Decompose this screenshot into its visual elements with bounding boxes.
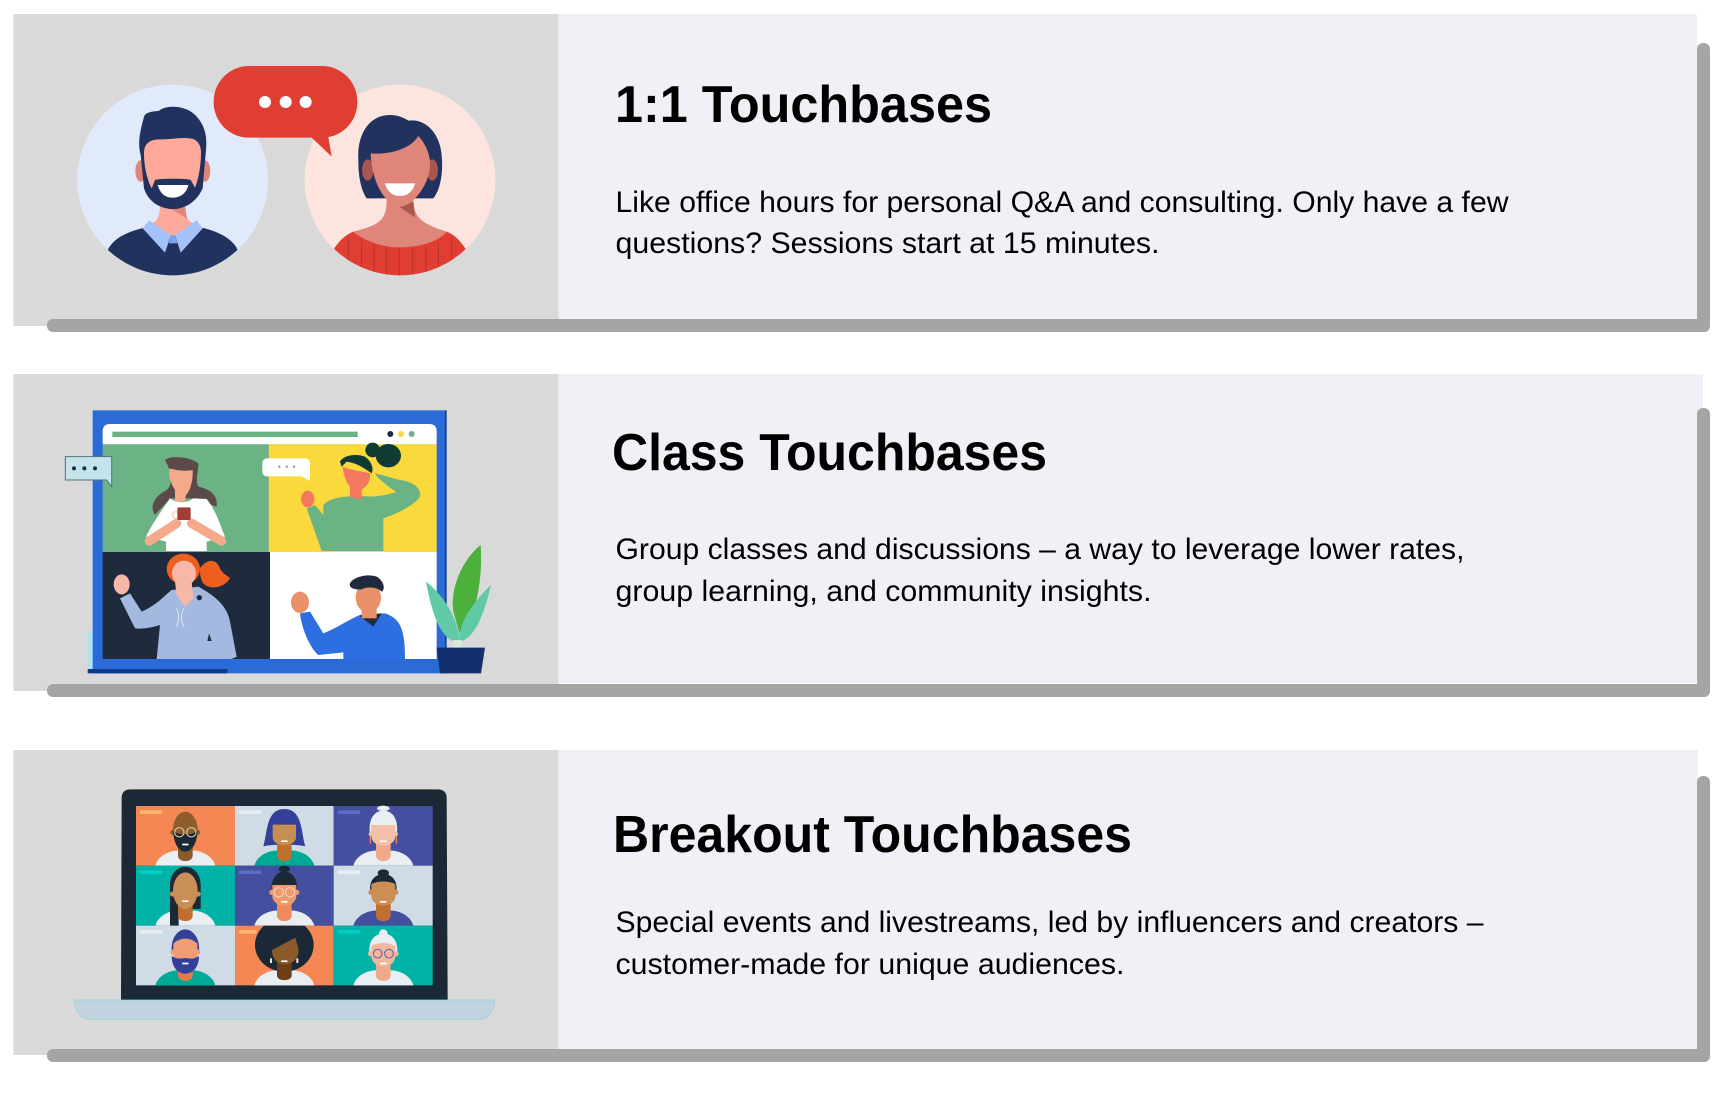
tile: woman with white hair (334, 806, 433, 866)
icon: left speech bubble (65, 457, 112, 487)
body text: customer-made for unique audiences. (616, 948, 1124, 981)
laptop body (74, 789, 495, 1019)
body text (616, 186, 1509, 260)
tile: older person with glasses (334, 926, 433, 985)
panel: breakout touchbases (14, 750, 1710, 1062)
video tile: woman with mug (103, 444, 269, 552)
panel background: image side (14, 14, 558, 326)
body text (616, 906, 1484, 981)
icon: man avatar (77, 85, 268, 280)
body text: questions? Sessions start at 15 minutes. (616, 227, 1160, 260)
panel background: text side (558, 750, 1698, 1049)
body text (616, 533, 1464, 608)
window frame (88, 410, 447, 673)
panel: 1:1 touchbases (14, 14, 1710, 332)
heading: Class Touchbases (612, 424, 1047, 482)
icon: speech bubble (214, 66, 357, 157)
heading: Breakout Touchbases (613, 806, 1132, 864)
frame bars (47, 43, 1710, 332)
illustration: two people chatting (77, 66, 495, 280)
body text: Special events and livestreams, led by influencers and creators – (616, 906, 1484, 939)
afro hair (255, 926, 314, 980)
panel background: image side (14, 750, 558, 1055)
body text: Group classes and discussions – a way to leverage lower rates, (616, 533, 1464, 566)
tile: man with indigo beard (136, 926, 235, 985)
illustration: laptop with video grid (74, 789, 495, 1019)
panel: class touchbases (14, 374, 1710, 697)
heading: 1:1 Touchbases (615, 76, 992, 134)
icon: potted plant (426, 545, 491, 673)
body text: Like office hours for personal Q&A and consulting. Only have a few (616, 186, 1509, 219)
tile: woman with bun and glasses (235, 866, 334, 926)
illustration: video call window (65, 410, 491, 673)
frame bars (47, 776, 1710, 1062)
body text: group learning, and community insights. (616, 575, 1152, 608)
video tile: woman in hoodie (103, 552, 270, 659)
panel background: image side (14, 374, 558, 691)
icon: woman avatar (305, 85, 495, 280)
tile: man with glasses and beard (136, 806, 235, 866)
tile: woman with afro (235, 926, 334, 985)
panel background: text side (558, 374, 1703, 683)
video tile: man waving (270, 552, 437, 659)
tile: woman with long hair (136, 866, 235, 926)
tile: man with topknot (334, 866, 433, 926)
panel background: text side (558, 14, 1697, 319)
frame bars (47, 408, 1710, 697)
icon: center speech bubble (262, 458, 310, 481)
video tile: woman with ponytail (269, 443, 437, 552)
tile: woman with bob (235, 806, 334, 866)
